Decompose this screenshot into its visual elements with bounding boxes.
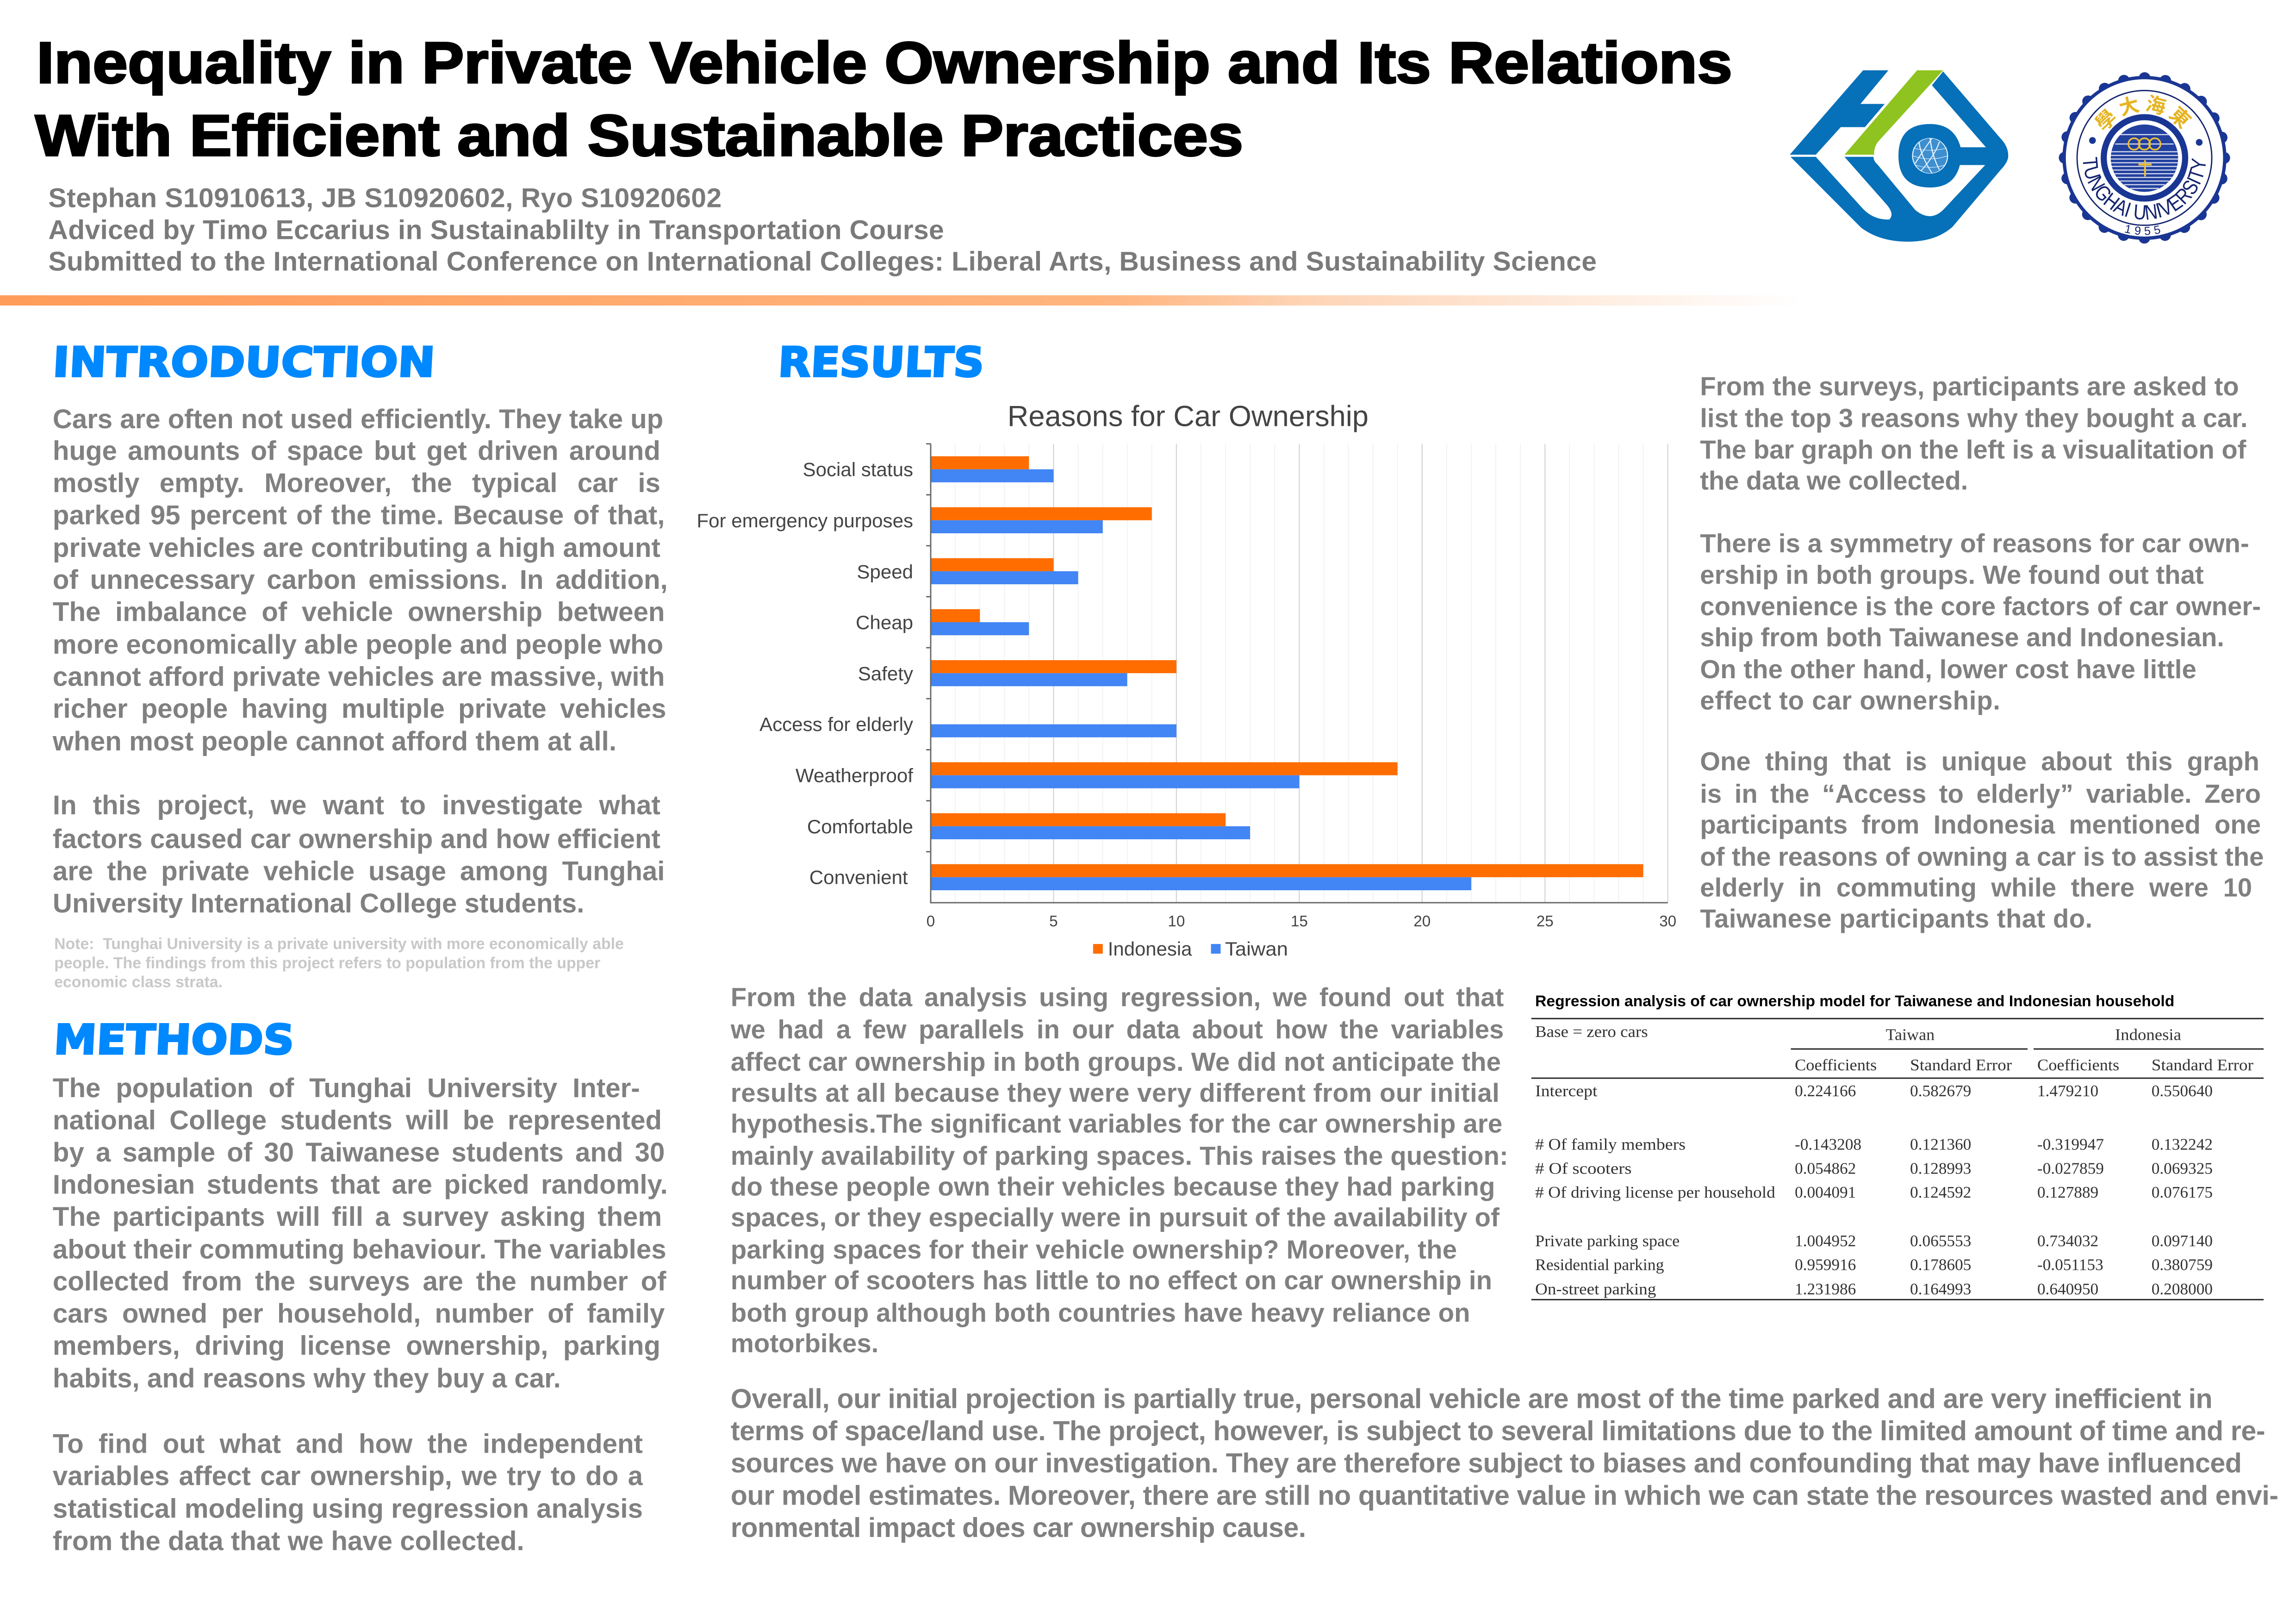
category labels: Access for elderly (759, 713, 913, 735)
table: regression analysis: -0.051153 (2037, 1255, 2103, 1274)
text block: methods: about their commuting behaviour. The variables (53, 1235, 666, 1265)
table: regression analysis: 0.121360 (1910, 1136, 1971, 1154)
bars: Taiwan (931, 469, 1471, 890)
table: regression analysis: Intercept (1535, 1082, 1598, 1100)
table: regression analysis: 0.124592 (1910, 1183, 1971, 1201)
axis tick labels: 25 (1537, 913, 1554, 930)
heading: introduction: INTRODUCTION (52, 338, 436, 386)
legend: Indonesia (1108, 938, 1192, 960)
table: regression analysis: Standard Error (2152, 1056, 2253, 1074)
axis tick labels: 10 (1168, 913, 1185, 930)
table: regression analysis: Indonesia (2115, 1025, 2181, 1043)
table: regression analysis: 0.069325 (2152, 1160, 2213, 1178)
text block: introduction: In this project, we want to investigate what (53, 790, 660, 820)
table: regression analysis: Private parking space (1535, 1232, 1680, 1250)
table: regression analysis: 0.224166 (1795, 1082, 1856, 1100)
chart title: Reasons for Car Ownership (1008, 400, 1369, 433)
category labels: Cheap (856, 612, 913, 633)
text block: conclusion: terms of space/land use. The project, however, is subject to several limitations due to the limited amount of time and re- (731, 1415, 2265, 1446)
text block: survey discussion: Taiwanese participants that do. (1700, 904, 2092, 933)
table: regression analysis: 0.127889 (2037, 1183, 2098, 1201)
table: regression analysis: # Of family members (1535, 1136, 1686, 1154)
text block: regression findings: do these people own their vehicles because they had parking (731, 1172, 1495, 1201)
note: Note: Tunghai University is a private university with more economically able (54, 935, 624, 953)
category labels: Social status (803, 458, 913, 480)
text block: introduction: University International College students. (53, 888, 584, 918)
table: regression analysis: -0.143208 (1795, 1136, 1861, 1154)
table: regression analysis: 0.640950 (2037, 1280, 2098, 1298)
table: regression analysis: 0.004091 (1795, 1183, 1856, 1201)
table: regression analysis: Coefficients (1795, 1056, 1877, 1074)
text block: survey discussion: participants from Indonesia mentioned one (1700, 811, 2261, 840)
table: regression analysis: 0.550640 (2152, 1082, 2213, 1100)
axis tick labels: 15 (1291, 913, 1308, 930)
title (35, 30, 1732, 168)
table: regression analysis: Standard Error (1910, 1056, 2012, 1074)
text block: regression findings: parking spaces for their vehicle ownership? Moreover, the (731, 1235, 1457, 1264)
text block: introduction: of unnecessary carbon emissions. In addition, (53, 564, 668, 594)
text block: methods: members, driving license ownership, parking (53, 1330, 660, 1361)
text block: regression findings: motorbikes. (731, 1329, 878, 1358)
text block: introduction: The imbalance of vehicle ownership between (53, 596, 665, 627)
text block: methods: variables affect car ownership, we try to do a (53, 1460, 643, 1491)
category labels (697, 458, 913, 888)
table: regression analysis: 0.164993 (1910, 1280, 1971, 1298)
table: regression analysis: 0.380759 (2152, 1255, 2213, 1274)
text block: methods: collected from the surveys are the number of (53, 1265, 666, 1296)
table: regression analysis: 1.231986 (1795, 1280, 1856, 1298)
text block: survey discussion: effect to car ownership. (1700, 686, 2000, 715)
table: regression analysis: Taiwan (1885, 1025, 1935, 1043)
text block: survey discussion: list the top 3 reasons why they bought a car. (1700, 403, 2248, 432)
text block: regression findings: both group although both countries have heavy reliance on (731, 1298, 1470, 1327)
heading: results: RESULTS (777, 338, 985, 386)
title: With Efficient and Sustainable Practices (35, 103, 1243, 168)
legend: Taiwan (1225, 938, 1288, 960)
legend (1093, 938, 1288, 960)
axis tick labels: 0 (927, 913, 935, 930)
table: regression analysis: Coefficients (2037, 1056, 2119, 1074)
authors and submission details (48, 183, 1597, 277)
text block: conclusion: our model estimates. Moreover, there are still no quantitative value in which we can state the resources wasted and envi- (731, 1480, 2278, 1511)
table: regression analysis (1531, 993, 2264, 1299)
text block: introduction: Cars are often not used efficiently. They take up (53, 404, 663, 434)
text block: conclusion: Overall, our initial projection is partially true, personal vehicle are most of the time parked and are very inefficient in (731, 1383, 2213, 1414)
heading: methods: METHODS (53, 1016, 295, 1063)
text block: survey discussion: the data we collected. (1700, 466, 1968, 495)
text block: introduction: richer people having multiple private vehicles (53, 693, 666, 724)
axis tick labels (927, 913, 1676, 930)
table: regression analysis: Base = zero cars (1535, 1023, 1648, 1041)
bars: Indonesia (931, 456, 1643, 877)
text block: regression findings: hypothesis.The significant variables for the car ownership are (731, 1109, 1502, 1138)
icon: conference logo (1790, 70, 2008, 242)
text block: regression findings: results at all because they were very different from our initial (731, 1078, 1500, 1107)
text block: survey discussion: convenience is the core factors of car owner- (1700, 592, 2261, 621)
table: regression analysis: 0.582679 (1910, 1082, 1971, 1100)
text block: methods: by a sample of 30 Taiwanese students and 30 (53, 1137, 665, 1167)
table: regression analysis: # Of scooters (1535, 1160, 1632, 1178)
text block: survey discussion: On the other hand, lower cost have little (1700, 655, 2196, 684)
text block: regression findings: spaces, or they especially were in pursuit of the availability of (731, 1203, 1500, 1232)
text block: conclusion: sources we have on our investigation. They are therefore subject to biases and confounding that may have influenced (731, 1448, 2242, 1479)
table: regression analysis: 0.054862 (1795, 1160, 1856, 1178)
text block: survey discussion: elderly in commuting while there were 10 (1700, 873, 2252, 902)
table title: Regression analysis of car ownership model for Taiwanese and Indonesian household (1535, 993, 2174, 1010)
category labels: For emergency purposes (697, 510, 913, 531)
text block: introduction: are the private vehicle usage among Tunghai (53, 855, 665, 886)
category labels: Convenient (809, 866, 908, 888)
table: regression analysis: 0.128993 (1910, 1160, 1971, 1178)
icon: Tunghai University seal: 1955 (2123, 222, 2165, 238)
axis tick labels: 5 (1049, 913, 1058, 930)
text block: methods (53, 1072, 668, 1556)
text block: survey discussion (1700, 372, 2264, 933)
table: regression analysis: 0.178605 (1910, 1255, 1971, 1274)
text block: methods: The population of Tunghai University Inter- (53, 1072, 640, 1103)
text block: introduction: factors caused car ownership and how efficient (53, 824, 660, 854)
text block: regression findings: mainly availability of parking spaces. This raises the question: (731, 1141, 1508, 1170)
text block: survey discussion: is in the “Access to elderly” variable. Zero (1700, 779, 2261, 808)
text block: survey discussion: One thing that is unique about this graph (1700, 748, 2259, 777)
authors and submission details: Adviced by Timo Eccarius in Sustainablilty in Transportation Course (48, 215, 944, 245)
table: regression analysis: 0.097140 (2152, 1232, 2213, 1250)
authors and submission details: Stephan S10910613, JB S10920602, Ryo S10920602 (48, 183, 722, 213)
category labels: Weatherproof (796, 765, 913, 787)
note (54, 935, 624, 991)
text block: introduction: more economically able people and people who (53, 630, 663, 660)
text block: introduction: private vehicles are contributing a high amount (53, 533, 660, 563)
orange gradient divider (0, 295, 1801, 306)
table: regression analysis: Residential parking (1535, 1255, 1664, 1274)
text block: regression findings: number of scooters has little to no effect on car ownership in (731, 1266, 1492, 1295)
note: people. The findings from this project refers to population from the upper (54, 954, 600, 972)
table: regression analysis: -0.319947 (2037, 1136, 2104, 1154)
text block: introduction: parked 95 percent of the time. Because of that, (53, 500, 665, 530)
text block: methods: To find out what and how the independent (53, 1428, 643, 1459)
text block: regression findings (731, 981, 1508, 1358)
category labels: Safety (858, 663, 913, 685)
table: regression analysis: 0.959916 (1795, 1255, 1856, 1274)
category labels: Comfortable (807, 816, 913, 837)
text block: conclusion (731, 1383, 2278, 1543)
table: regression analysis: 1.004952 (1795, 1232, 1856, 1250)
table: regression analysis: 0.734032 (2037, 1232, 2098, 1250)
text block: survey discussion: ship from both Taiwanese and Indonesian. (1700, 623, 2224, 652)
category labels: Speed (857, 561, 913, 583)
text block: survey discussion: of the reasons of owning a car is to assist the (1700, 842, 2264, 871)
text block: regression findings: From the data analysis using regression, we found out that (731, 983, 1504, 1012)
table: regression analysis: 0.208000 (2152, 1280, 2213, 1298)
table: regression analysis: 1.479210 (2037, 1082, 2098, 1100)
text block: survey discussion: ership in both groups. We found out that (1700, 560, 2204, 589)
text block: introduction: huge amounts of space but get driven around (53, 435, 660, 466)
icon: Tunghai University seal: 學大海東 (2088, 87, 2201, 137)
text block: conclusion: ronmental impact does car ownership cause. (731, 1512, 1306, 1543)
text block: introduction (52, 404, 668, 918)
text block: introduction: mostly empty. Moreover, the typical car is (53, 467, 660, 498)
text block: regression findings: we had a few parallels in our data about how the variables (731, 1015, 1504, 1044)
text block: survey discussion: There is a symmetry of reasons for car own- (1700, 529, 2249, 558)
text block: introduction: cannot afford private vehicles are massive, with (53, 662, 665, 692)
text block: methods: statistical modeling using regression analysis (53, 1494, 643, 1524)
text block: introduction: when most people cannot afford them at all. (52, 726, 616, 756)
text block: survey discussion: From the surveys, participants are asked to (1700, 372, 2239, 401)
bar chart: reasons for car ownership (697, 400, 1676, 960)
table: regression analysis: # Of driving license per household (1535, 1183, 1775, 1201)
text block: methods: Indonesian students that are picked randomly. (53, 1168, 668, 1199)
text block: survey discussion: The bar graph on the left is a visualitation of (1700, 435, 2246, 464)
authors and submission details: Submitted to the International Conference on International Colleges: Liberal Arts, Business and Sustainability Science (48, 247, 1597, 277)
table: regression analysis: 0.076175 (2152, 1183, 2213, 1201)
text block: regression findings: affect car ownership in both groups. We did not anticipate the (731, 1047, 1501, 1076)
text block: methods: habits, and reasons why they buy a car. (53, 1363, 561, 1393)
table: regression analysis: 0.065553 (1910, 1232, 1971, 1250)
text block: methods: national College students will be represented (53, 1104, 662, 1135)
table: regression analysis: 0.132242 (2152, 1136, 2213, 1154)
axis tick labels: 20 (1413, 913, 1431, 930)
text block: methods: from the data that we have collected. (53, 1526, 524, 1556)
title: Inequality in Private Vehicle Ownership and Its Relations (37, 30, 1732, 95)
axis tick labels: 30 (1659, 913, 1676, 930)
table: regression analysis: -0.027859 (2037, 1160, 2104, 1178)
note: economic class strata. (54, 973, 223, 991)
icon: Tunghai University seal: TUNGHAI UNIVERSITY (2078, 156, 2211, 225)
text block: methods: The participants will fill a survey asking them (53, 1201, 662, 1231)
icon: Tunghai University seal (2062, 76, 2227, 240)
table: regression analysis: On-street parking (1535, 1280, 1656, 1298)
text block: methods: cars owned per household, number of family (53, 1298, 665, 1328)
